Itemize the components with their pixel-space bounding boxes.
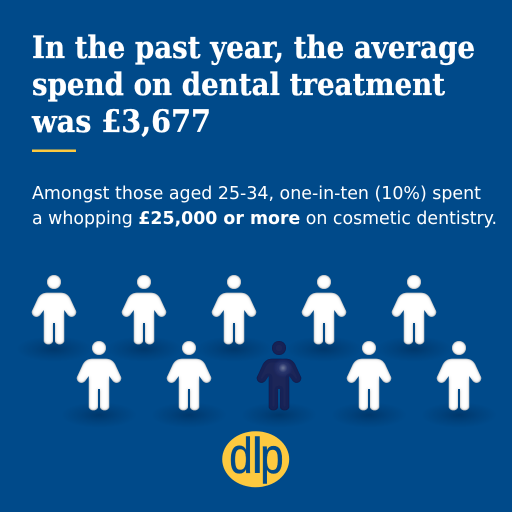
body text: a whopping £25,000 or more on cosmetic dentistry. bbox=[32, 208, 497, 229]
logo: dlp: p bbox=[260, 428, 284, 484]
logo: dlp bbox=[222, 428, 289, 487]
highlighted dark person bbox=[257, 341, 301, 410]
body text bbox=[32, 183, 497, 229]
title: was £3,677 bbox=[31, 104, 211, 140]
top row of people bbox=[32, 275, 436, 344]
person shadows bbox=[16, 336, 497, 428]
bottom row of people bbox=[77, 341, 481, 410]
logo: dlp: l bbox=[252, 428, 263, 484]
logo: dlp: d bbox=[229, 428, 253, 484]
title bbox=[31, 30, 475, 140]
title underline bbox=[32, 150, 76, 152]
title: spend on dental treatment bbox=[32, 67, 446, 103]
body text: Amongst those aged 25-34, one-in-ten (10%) spent bbox=[32, 183, 481, 204]
people pictogram: one in ten highlighted bbox=[16, 275, 497, 428]
